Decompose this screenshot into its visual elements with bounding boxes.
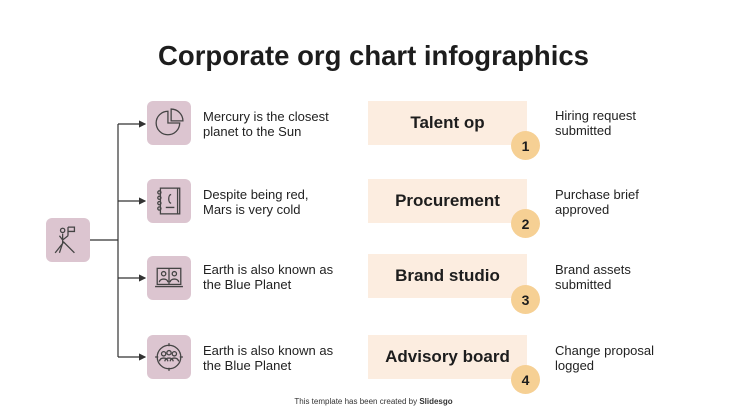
badge 4: 4 xyxy=(522,372,529,388)
box: Procurement: Procurement xyxy=(395,191,500,210)
text: row 3 description: Earth is also known as xyxy=(203,262,333,277)
badge 1 xyxy=(511,131,540,160)
badge 2 xyxy=(511,209,540,238)
text: row 1 status: submitted xyxy=(555,123,611,138)
icon: pie chart xyxy=(147,101,191,145)
box: Advisory board xyxy=(368,335,527,379)
text: row 2 description: Despite being red, xyxy=(203,187,309,202)
icon: address book xyxy=(147,179,191,223)
text: row 4 description xyxy=(203,343,333,373)
text: row 1 status xyxy=(555,108,636,138)
text: row 1 description: Mercury is the closest xyxy=(203,109,329,124)
box: Brand studio xyxy=(368,254,527,298)
badge 1: 1 xyxy=(522,138,529,154)
box: Procurement xyxy=(368,179,527,223)
text: row 1 description xyxy=(203,109,329,139)
text: row 2 description: Mars is very cold xyxy=(203,202,301,217)
footer credit: This template has been created by Slidesgo xyxy=(294,397,453,406)
box: Brand studio: Brand studio xyxy=(395,266,500,285)
text: row 3 description xyxy=(203,262,333,292)
box: Talent op: Talent op xyxy=(410,113,485,132)
text: row 2 status: Purchase brief xyxy=(555,187,639,202)
text: row 1 status: Hiring request xyxy=(555,108,636,123)
text: row 4 status: Change proposal xyxy=(555,343,654,358)
text: row 3 description: the Blue Planet xyxy=(203,277,291,292)
icon: team circle xyxy=(147,335,191,379)
icon: video call xyxy=(147,256,191,300)
text: row 4 description: Earth is also known as xyxy=(203,343,333,358)
text: row 4 description: the Blue Planet xyxy=(203,358,291,373)
text: row 2 status xyxy=(555,187,639,217)
icon: root person with flag xyxy=(46,218,90,262)
box: Advisory board: Advisory board xyxy=(385,347,510,366)
text: row 3 status xyxy=(555,262,631,292)
title: Corporate org chart infographics xyxy=(158,40,589,71)
text: row 4 status: logged xyxy=(555,358,594,373)
badge 2: 2 xyxy=(522,216,529,232)
text: row 2 status: approved xyxy=(555,202,609,217)
text: row 4 status xyxy=(555,343,654,373)
badge 3: 3 xyxy=(522,292,529,308)
badge 4 xyxy=(511,365,540,394)
badge 3 xyxy=(511,285,540,314)
text: row 3 status: Brand assets xyxy=(555,262,631,277)
text: row 1 description: planet to the Sun xyxy=(203,124,301,139)
text: row 3 status: submitted xyxy=(555,277,611,292)
box: Talent op xyxy=(368,101,527,145)
text: row 2 description xyxy=(203,187,309,217)
